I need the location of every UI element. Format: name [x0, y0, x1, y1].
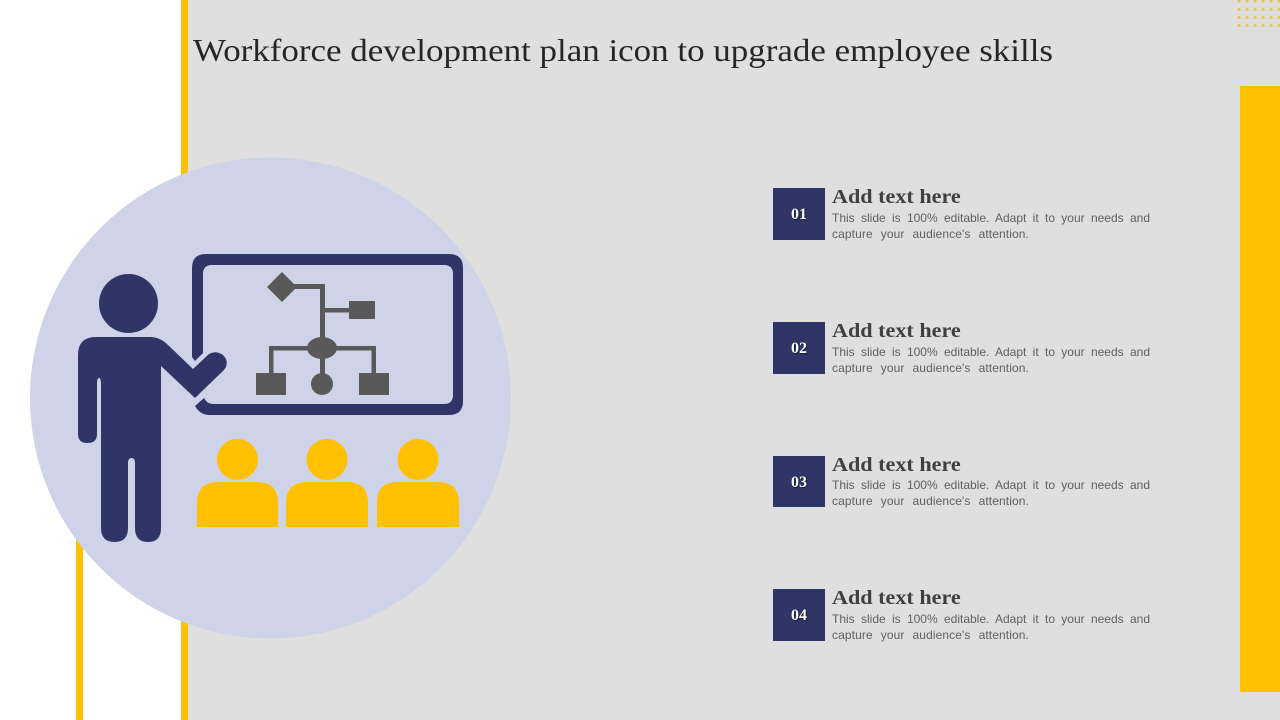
number badge 04: 04: [791, 607, 807, 624]
description 01: capture your audience's attention.: [832, 227, 1029, 241]
icon: trainer figure: [78, 274, 227, 542]
description 02: capture your audience's attention.: [832, 361, 1029, 375]
illustration: trainer presenting to audience: [30, 158, 511, 638]
icon: presentation board: [192, 254, 463, 415]
heading 03: Add text here: [832, 454, 961, 476]
title: Workforce development plan icon to upgrade employee skills: [193, 32, 1053, 68]
number badge 03: 03: [791, 474, 807, 491]
heading 04: Add text here: [832, 587, 961, 609]
item 01: [773, 186, 1150, 241]
yellow vertical bar: lower left: [76, 530, 83, 720]
number badge 01: 01: [791, 206, 807, 223]
description 01: [832, 211, 1150, 241]
number badge 01: [773, 188, 825, 240]
number badge 04: [773, 589, 825, 641]
number badge 03: [773, 456, 825, 507]
item 04: [773, 587, 1150, 642]
description 02: [832, 345, 1150, 375]
item 02: [773, 320, 1150, 375]
number badge 02: [773, 322, 825, 374]
yellow vertical bar: main: [181, 0, 188, 720]
description 01: This slide is 100% editable. Adapt it to your needs and: [832, 211, 1150, 225]
item 03: [773, 454, 1150, 508]
yellow side panel: right: [1240, 86, 1280, 692]
background circle: [30, 158, 511, 638]
dot pattern: top right: [1237, 0, 1280, 28]
icon: audience: [197, 439, 459, 527]
description 03: This slide is 100% editable. Adapt it to your needs and: [832, 478, 1150, 492]
heading 01: Add text here: [832, 186, 961, 208]
description 04: This slide is 100% editable. Adapt it to your needs and: [832, 612, 1150, 626]
description 02: This slide is 100% editable. Adapt it to your needs and: [832, 345, 1150, 359]
number badge 02: 02: [791, 340, 807, 357]
description 03: capture your audience's attention.: [832, 494, 1029, 508]
description 04: [832, 612, 1150, 642]
description 03: [832, 478, 1150, 508]
heading 02: Add text here: [832, 320, 961, 342]
icon: flow chart: [256, 272, 389, 395]
description 04: capture your audience's attention.: [832, 628, 1029, 642]
